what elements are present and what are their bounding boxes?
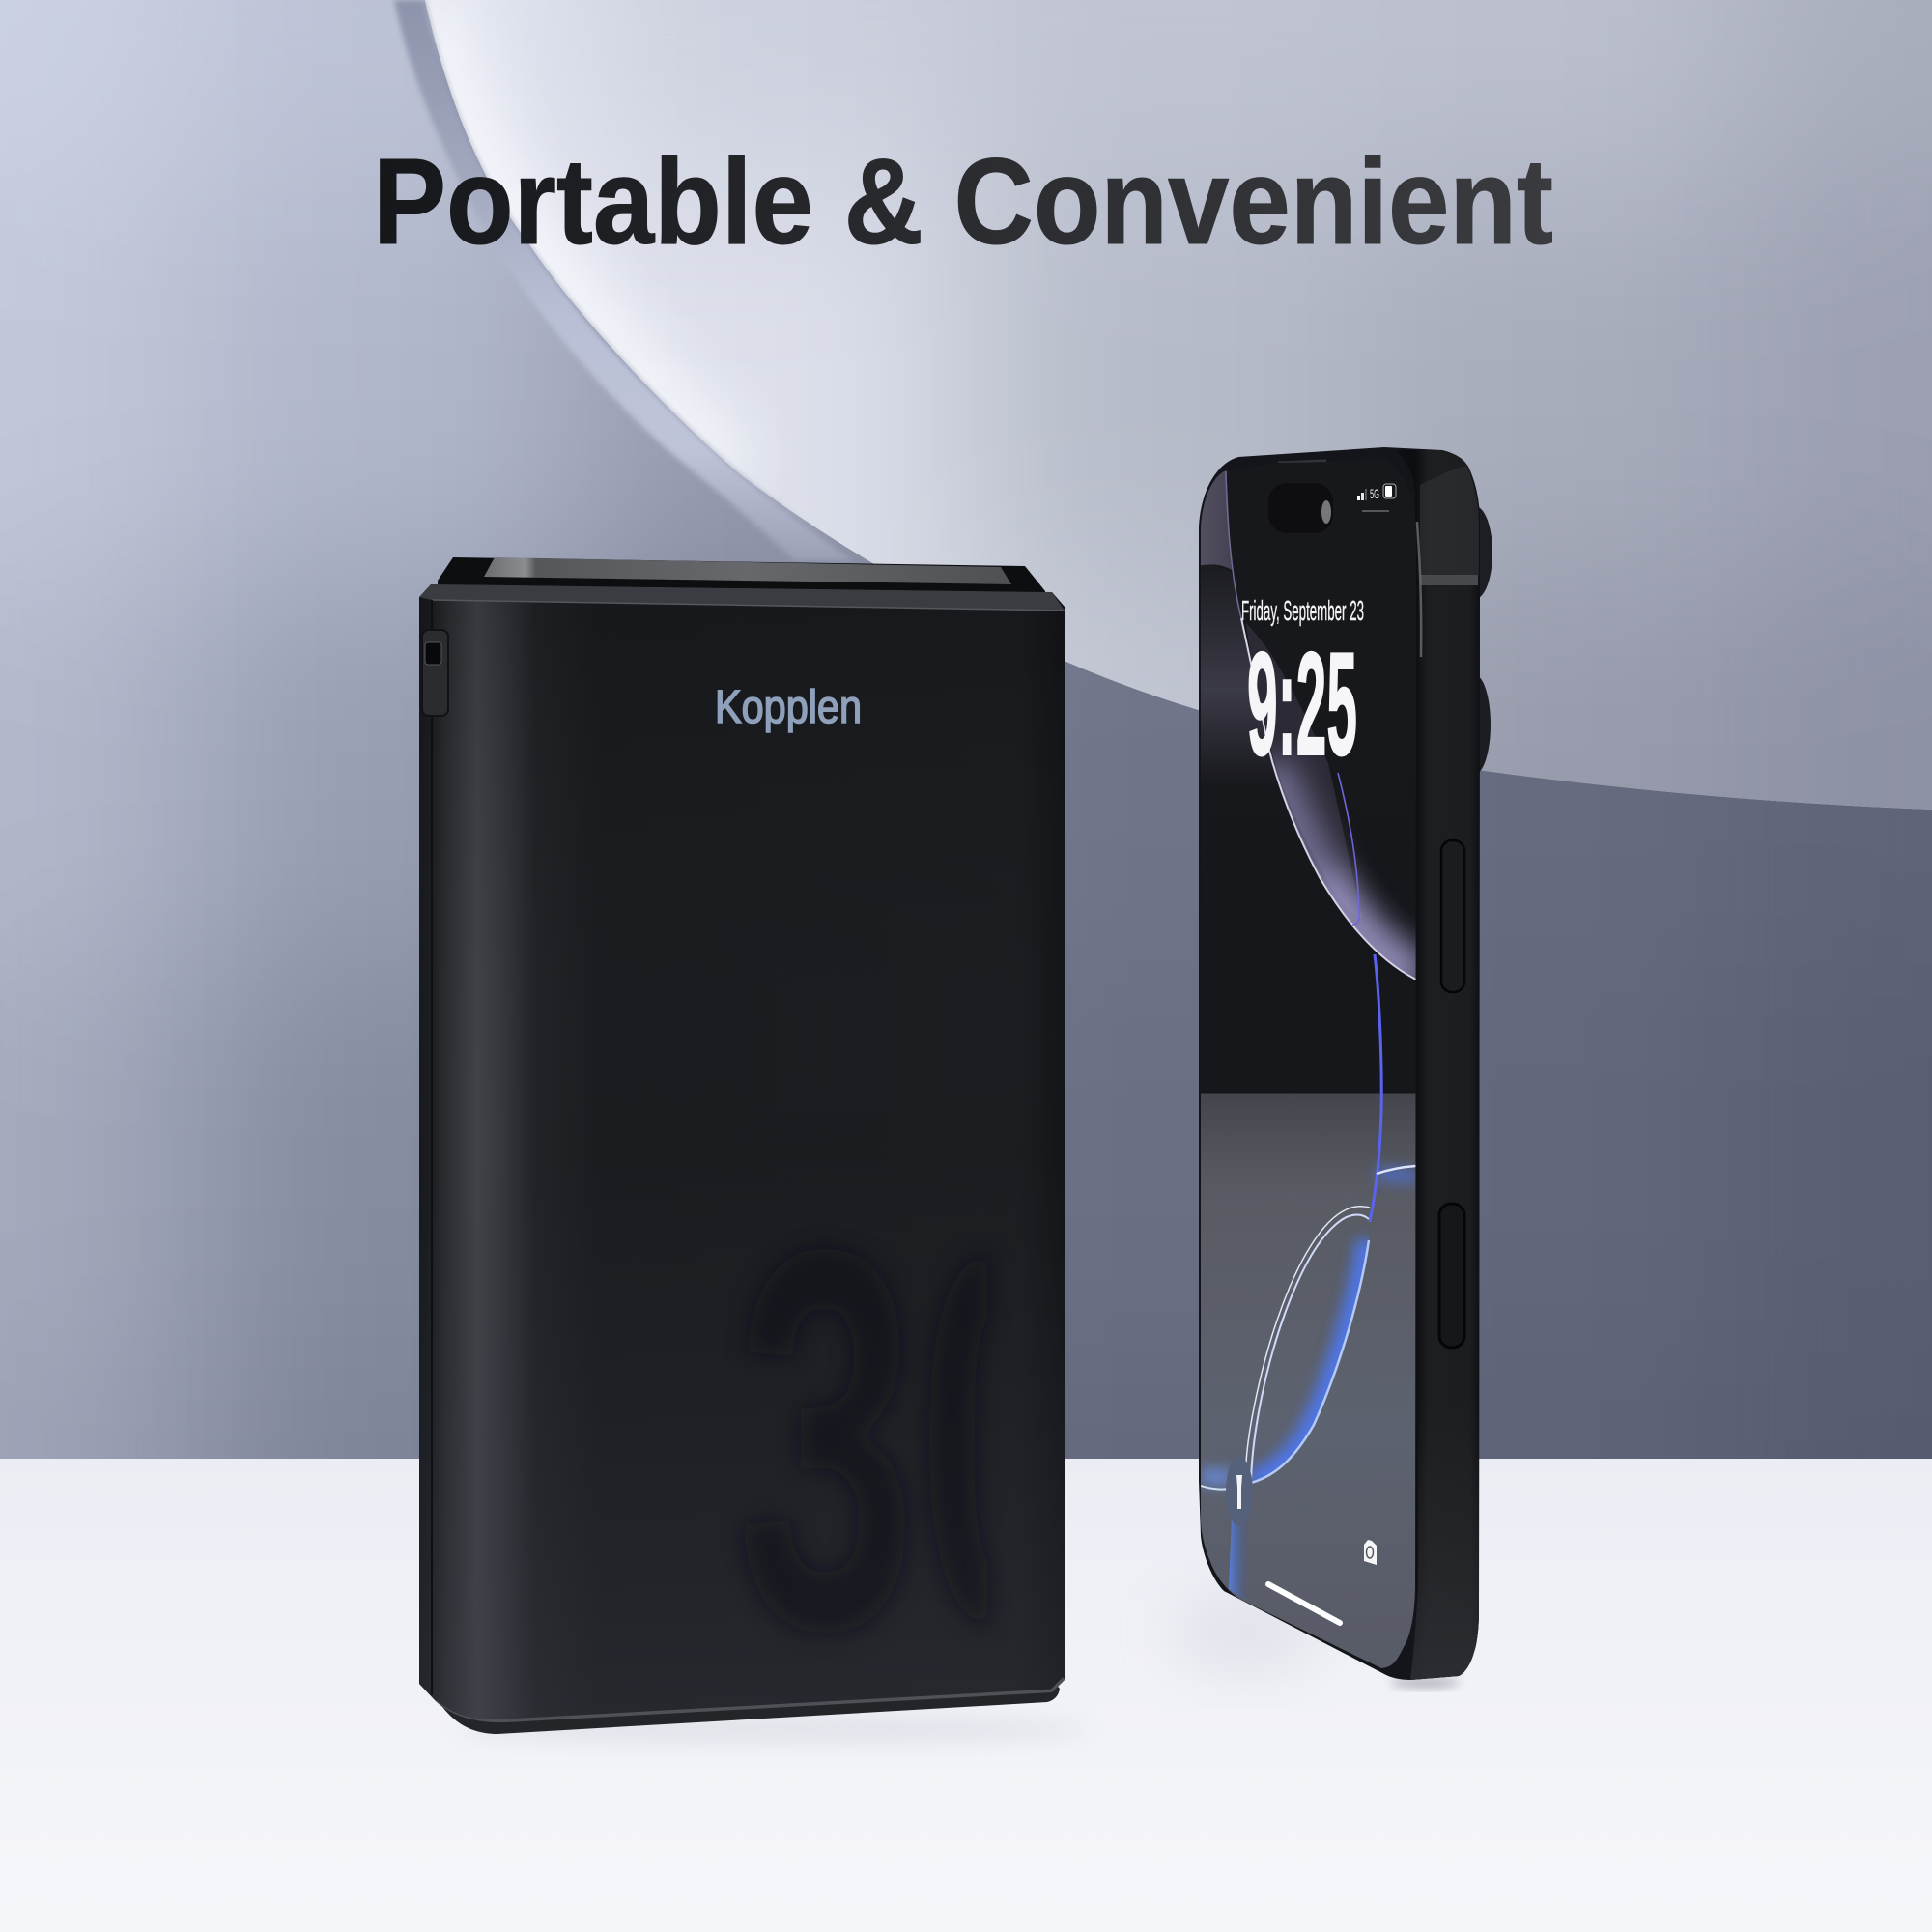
flashlight button [1226,1457,1253,1526]
wallpaper: lower left blue stripe [1229,1517,1248,1604]
wallpaper: purple left sliver [1201,471,1232,570]
phone side frame [1396,450,1480,1680]
status bar [1357,484,1396,512]
camera bumps [1458,506,1492,775]
USB-C port cover [422,630,448,716]
dynamic island [1268,483,1333,533]
wallpaper: mid wedge [1246,623,1362,918]
power bank [415,557,1097,1742]
camera button [1364,1540,1377,1565]
smartphone [1198,447,1492,1680]
phone screen [1198,454,1420,1676]
arc edge shadow line [425,0,856,560]
top speaker slit [1278,461,1326,463]
light disc behind the arc [425,0,1932,810]
wallpaper: purple disc rim [1268,763,1416,980]
wallpaper: lens glow [1251,1240,1369,1483]
smartphone: Friday, September 23 [1241,596,1364,627]
bank top cap [438,557,1045,597]
side button: lower [1439,1204,1464,1348]
ghost capacity numerals: 30 [736,1137,1097,1742]
home indicator [1268,1584,1340,1623]
status bar: 5G [1370,486,1379,501]
phone body [1199,447,1480,1680]
wallpaper: lower left glow [1201,577,1273,771]
side button: upper [1441,840,1464,992]
title: Portable & Convenient [373,133,1553,270]
smartphone: 9:25 [1247,622,1357,786]
arc band [394,0,856,560]
brand logo: Kopplen [715,682,862,733]
bank underside lip [435,1681,1060,1734]
bank body [415,580,1097,1742]
wallpaper: lens outlines [1201,1166,1416,1490]
table surface [0,1459,1932,1932]
wallpaper: blue lines [1338,773,1381,1222]
